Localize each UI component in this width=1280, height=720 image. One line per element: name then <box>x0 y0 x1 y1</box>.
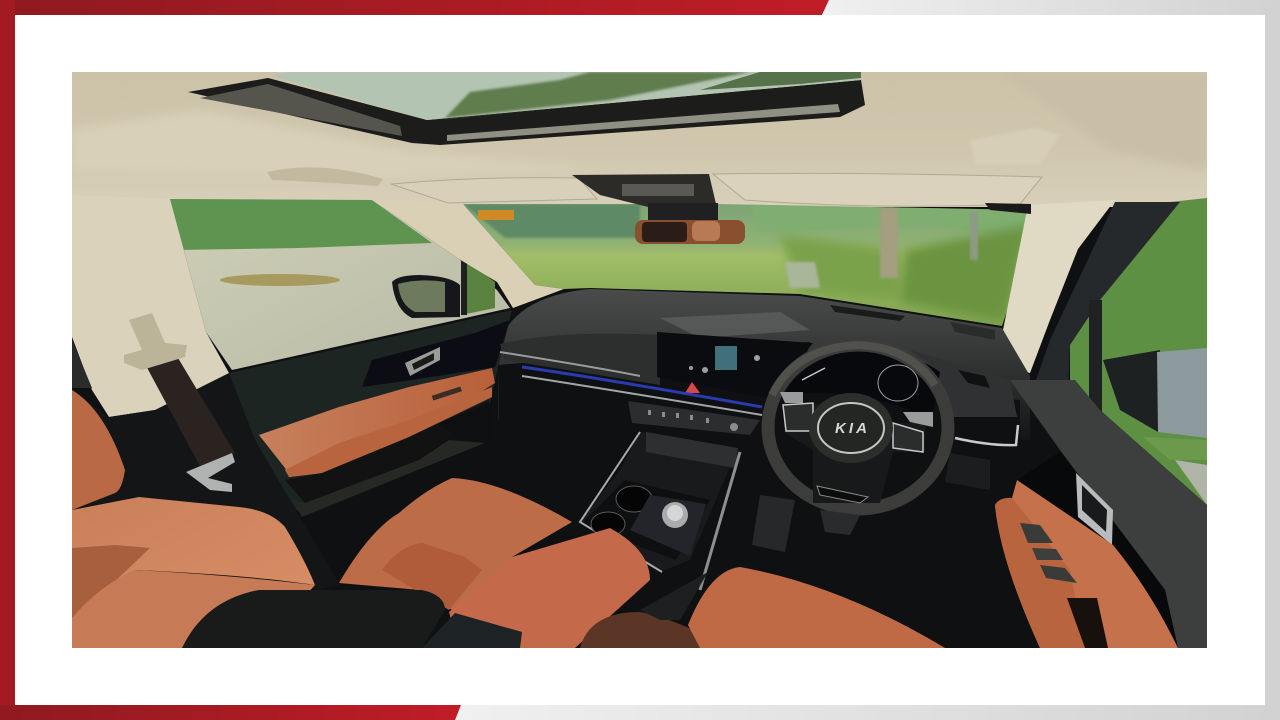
dashboard top <box>498 289 1030 440</box>
wheel ring <box>768 345 948 509</box>
center control strip <box>628 401 760 435</box>
right dash side <box>945 370 1017 490</box>
ceiling <box>72 72 1207 207</box>
Kia logo: KIA <box>835 420 867 437</box>
A-pillar right and door frame <box>1000 200 1180 412</box>
frame: left band <box>0 0 15 720</box>
frame: bottom band <box>0 705 1280 720</box>
sunroof <box>188 72 865 145</box>
frame: right band <box>1265 0 1280 720</box>
instrument cluster <box>800 352 940 392</box>
left door panel <box>229 310 512 517</box>
frame: top band <box>0 0 1280 15</box>
ambient trim <box>500 352 1018 445</box>
small console bits <box>422 612 728 648</box>
header trim and sun visors <box>267 167 1042 214</box>
photo: car interior <box>72 72 1207 648</box>
armrest black <box>182 590 445 648</box>
belt and anchor <box>108 313 294 508</box>
side window left <box>170 199 510 370</box>
wing mirror <box>392 275 460 318</box>
gear console <box>580 432 740 590</box>
ceiling handle bump <box>972 130 1056 152</box>
central dash: screen <box>498 332 1020 432</box>
B-pillar <box>72 195 229 417</box>
footwell pedal <box>752 495 795 552</box>
spokes and hub <box>783 403 925 503</box>
A-pillar left <box>372 200 564 308</box>
right door black and tan panels <box>995 473 1178 648</box>
grey door top panel right <box>1010 380 1207 648</box>
front passenger seat <box>339 478 572 610</box>
steering wheel <box>768 345 948 509</box>
armrest tan <box>449 528 650 648</box>
right window <box>1070 198 1207 505</box>
windshield <box>463 204 1031 326</box>
photo base <box>72 207 1207 648</box>
left seat <box>72 390 315 648</box>
sticker <box>478 210 514 220</box>
driver seat <box>688 567 945 648</box>
rear-view mirror <box>635 203 745 244</box>
